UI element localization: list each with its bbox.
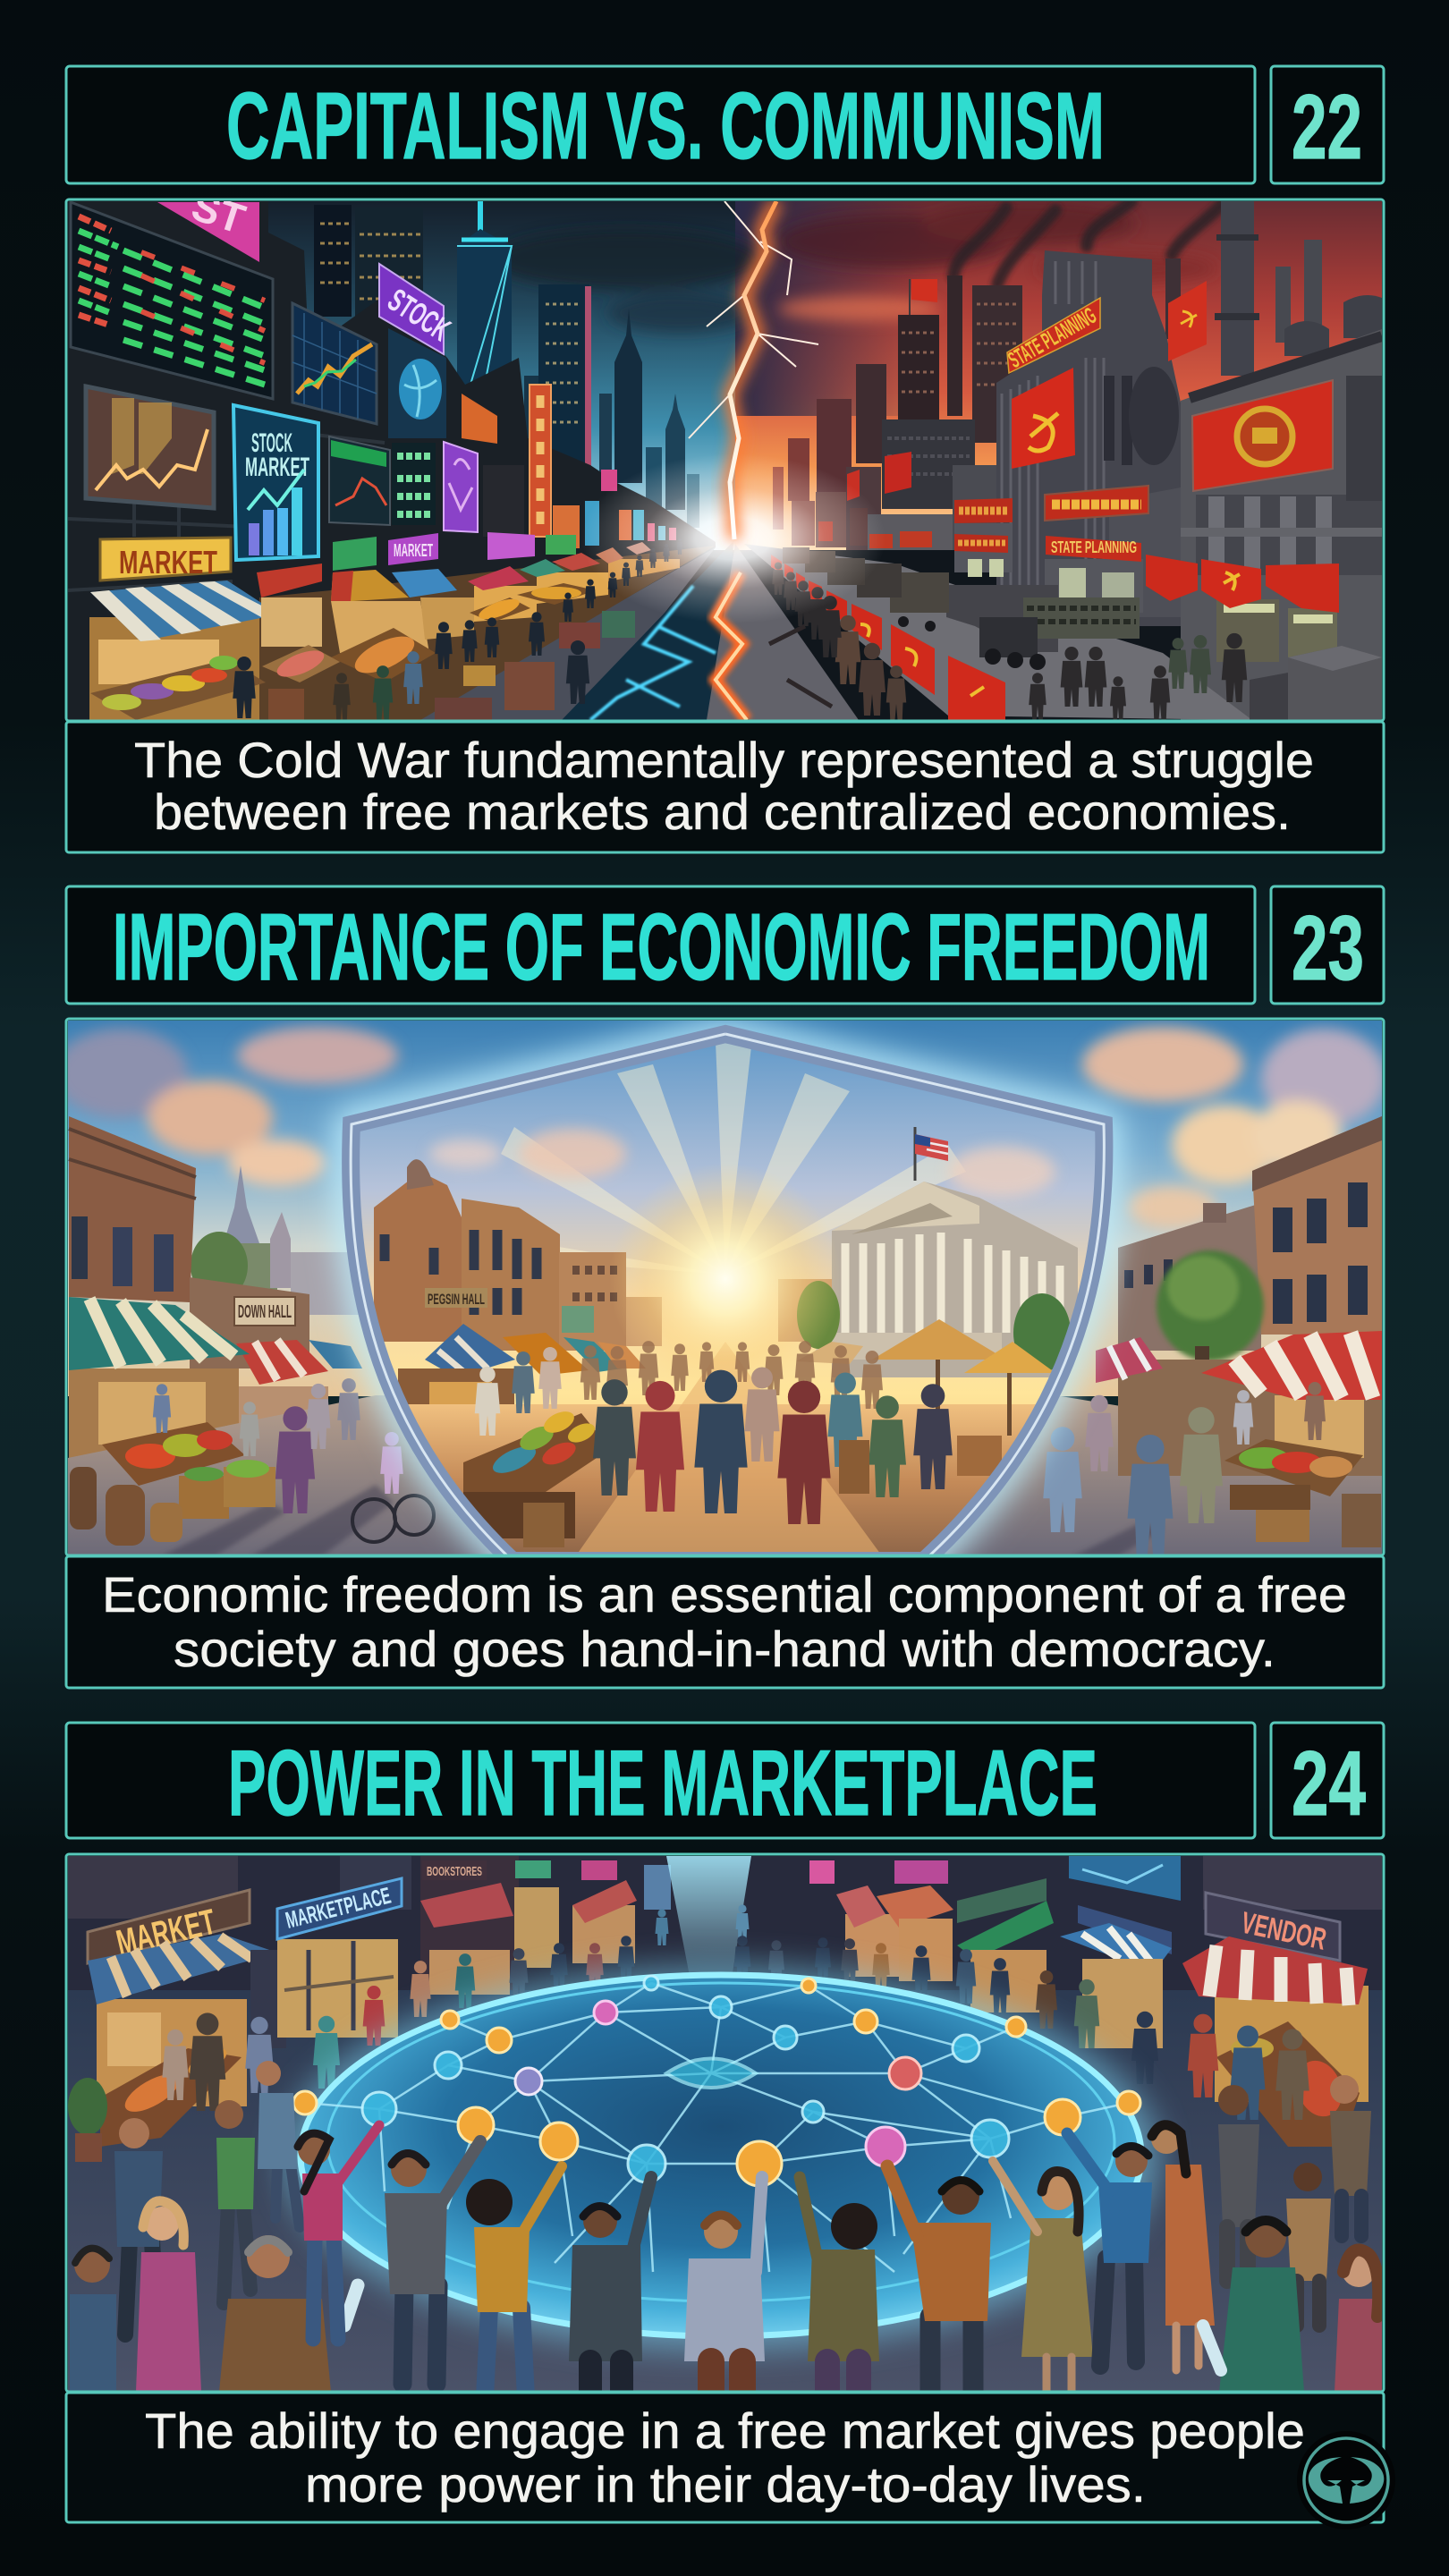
illustration: people around a glowing market network: [68, 1856, 1382, 2397]
market sign: MARKET: [119, 544, 217, 580]
soviet style flags and state planning banners: STATE PLANNING: [1051, 538, 1137, 556]
stock market screen: STOCK: [251, 428, 292, 458]
number badge 22: 22: [1292, 76, 1362, 178]
market shop: [68, 1856, 286, 2162]
chimneys: [1215, 201, 1382, 376]
ticker board: [71, 202, 273, 399]
number badge 23: [1271, 886, 1384, 1004]
market shop: MARKET: [113, 1902, 219, 1963]
storefronts far: BOOKSTORES: [427, 1864, 482, 1879]
stock market screen: MARKET: [245, 453, 309, 482]
dark jacket person: [569, 2177, 651, 2397]
heading: power in the marketplace: [66, 1723, 1255, 1838]
central horizon glow: [581, 453, 886, 623]
soldiers and workers: [772, 562, 1247, 720]
shield frame: [351, 1034, 1104, 1561]
glowing network disc: [283, 1965, 1159, 2350]
green chart and numbers: [329, 436, 436, 525]
right distant buildings: [773, 258, 1181, 530]
clouds: [54, 1027, 1386, 1229]
vendor shop: [1182, 1856, 1382, 2147]
number badge 24: [1271, 1723, 1384, 1838]
illustration: free market city versus state planned industry split by lightning: [68, 182, 1382, 720]
soviet style flags and state planning banners: [910, 279, 1339, 613]
stock market screen: [233, 405, 318, 560]
stock sign: [379, 264, 457, 354]
chart screen: [292, 303, 377, 424]
distant neon signs: [487, 470, 676, 560]
caption: economic freedom: Economic freedom is an essential component of a free: [102, 1566, 1347, 1623]
mustard top person: [466, 2166, 562, 2397]
center light beam: [666, 1856, 751, 1995]
sun rays: [429, 1042, 966, 1275]
crates: [1250, 646, 1382, 720]
lightning bolt: [689, 201, 818, 539]
trucks in convoy: [783, 547, 1140, 670]
scene inside shield: [340, 1029, 1109, 1565]
vendor shop: VENDOR: [1238, 1906, 1329, 1957]
caption: power in the market: more power in their day-to-day lives.: [305, 2456, 1146, 2512]
caption: cold war: between free markets and centralized economies.: [154, 784, 1291, 840]
grey sweater person: [385, 2141, 480, 2384]
sky: [68, 1021, 1382, 1396]
right side onlookers: [1151, 2075, 1382, 2392]
stock sign: STOCK: [382, 281, 457, 348]
pink neon sign: ST: [186, 182, 250, 242]
road and lightning fracture: [590, 544, 1252, 720]
heading: capitalism vs communism: [66, 66, 1255, 183]
inner market people: [475, 1347, 1002, 1524]
inner temple with flag: [797, 1127, 1078, 1377]
left outer buildings: DOWN HALL: [238, 1302, 292, 1322]
logo badge: [1297, 2431, 1395, 2529]
left outer people: [153, 1378, 434, 1542]
left side onlookers: [70, 2061, 358, 2392]
market stalls: [89, 542, 716, 720]
left outer buildings: [69, 1116, 362, 1368]
inner town buildings: PEGSIN HALL: [428, 1291, 485, 1308]
market sign: [100, 538, 231, 580]
green and purple shop signs: MARKET: [394, 541, 433, 561]
market street: [411, 547, 716, 720]
price chart screen: [86, 386, 214, 508]
right sky: [735, 201, 1382, 550]
tan dress person: [993, 2161, 1093, 2392]
caption: economic freedom: [66, 1556, 1384, 1688]
outer street: [68, 1395, 572, 1555]
right produce stall and people: [1043, 1382, 1381, 1558]
globe screen: [388, 328, 446, 438]
pink neon sign: [157, 201, 259, 262]
crowd silhouettes: [580, 1341, 883, 1409]
inner town buildings: [374, 1159, 832, 1440]
olive jacket person: [800, 2177, 879, 2397]
network nodes: [293, 1976, 1140, 2186]
left sky: [268, 201, 735, 550]
capitalist skyline: [314, 201, 699, 528]
caption: economic freedom: society and goes hand-in-hand with democracy.: [174, 1621, 1275, 1677]
storefronts far: [340, 1856, 1181, 2048]
left awnings and shops: [69, 1297, 362, 1471]
caption: cold war: The Cold War fundamentally represented a struggle: [134, 732, 1314, 788]
purple neon screen: [444, 442, 478, 532]
canopies: [796, 1319, 1055, 1440]
marketplace shop: MARKETPLACE: [283, 1882, 394, 1934]
number badge 23: 23: [1292, 897, 1364, 999]
caption: power in the market: The ability to engage in a free market gives people: [145, 2402, 1305, 2459]
right outer buildings: [1096, 1116, 1382, 1476]
illustration: shielded market street at sunrise: [54, 1021, 1386, 1565]
network links: [305, 1983, 1129, 2272]
market shoppers: [233, 538, 682, 720]
panel: importance of economic freedom: [54, 886, 1386, 1688]
blue shirt person: [1067, 2133, 1152, 2366]
central produce stall: [463, 1407, 610, 1547]
green and purple shop signs: [257, 533, 438, 597]
number badge 22: [1271, 66, 1384, 183]
white hoodie person: [684, 2177, 765, 2397]
back crowd: [162, 1904, 1309, 2120]
number badge 24: 24: [1292, 1733, 1366, 1835]
factory buildings: [954, 250, 1382, 720]
soviet style flags and state planning banners: STATE PLANNING: [1004, 301, 1101, 373]
marketplace shop: [277, 1878, 402, 2038]
raised-hand crowd in foreground: [70, 2061, 1382, 2397]
pink sweater person: [298, 2125, 379, 2339]
road flags: [771, 555, 1005, 720]
panel: power in the marketplace: [66, 1723, 1384, 2522]
caption: cold war: [66, 722, 1384, 852]
orange signs: [462, 385, 551, 537]
inner ground and central path: [340, 1404, 1109, 1561]
shield glow: [351, 1034, 1104, 1561]
orange sweater person: [887, 2166, 991, 2397]
industrial blocks mid distance: [792, 419, 1006, 550]
left produce stall: [70, 1422, 275, 1546]
left building wall: [68, 201, 716, 720]
panel: capitalism vs communism: [66, 66, 1384, 852]
smoke plumes: [953, 201, 1225, 284]
caption: power in the market: [66, 2393, 1384, 2522]
